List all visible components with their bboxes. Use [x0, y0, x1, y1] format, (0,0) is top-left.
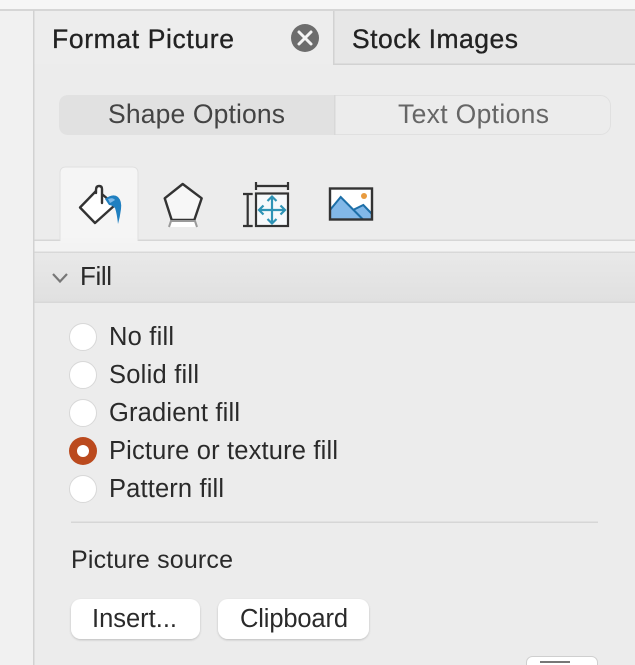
radio: no fill: [70, 323, 174, 351]
tab: format picture: Format Picture: [52, 24, 234, 54]
icon: pentagon shape: [165, 184, 202, 227]
button: clipboard: Clipboard: [240, 605, 348, 633]
segmented control: Text Options: [398, 99, 549, 129]
tab: format picture: [34, 11, 333, 64]
radio: solid fill: [70, 361, 199, 389]
segmented control: [59, 95, 610, 135]
tab: stock images: [333, 11, 635, 65]
icon tab strip: [34, 167, 635, 252]
button: insert: [71, 599, 200, 639]
radio: picture or texture fill (selected): Picture or texture fill: [109, 437, 338, 465]
section header: fill: [34, 252, 635, 303]
tab: stock images: Stock Images: [352, 24, 518, 54]
icon: paint bucket: [80, 186, 121, 224]
button: clipboard: [218, 599, 369, 639]
icon: picture: [330, 188, 372, 220]
button: insert: Insert...: [92, 605, 177, 633]
radio: solid fill: Solid fill: [109, 361, 199, 389]
section header: fill: Fill: [80, 261, 112, 291]
icon: close button: [291, 24, 319, 52]
icon: size and properties: [243, 182, 288, 226]
icon: chevron: [53, 274, 67, 282]
radio: gradient fill: Gradient fill: [109, 399, 240, 427]
label: picture source: Picture source: [71, 546, 233, 574]
radio: pattern fill: Pattern fill: [109, 475, 224, 503]
radio: no fill: No fill: [109, 323, 174, 351]
segmented control: Shape Options: [108, 99, 285, 129]
button: partial, cut off: [526, 656, 598, 665]
